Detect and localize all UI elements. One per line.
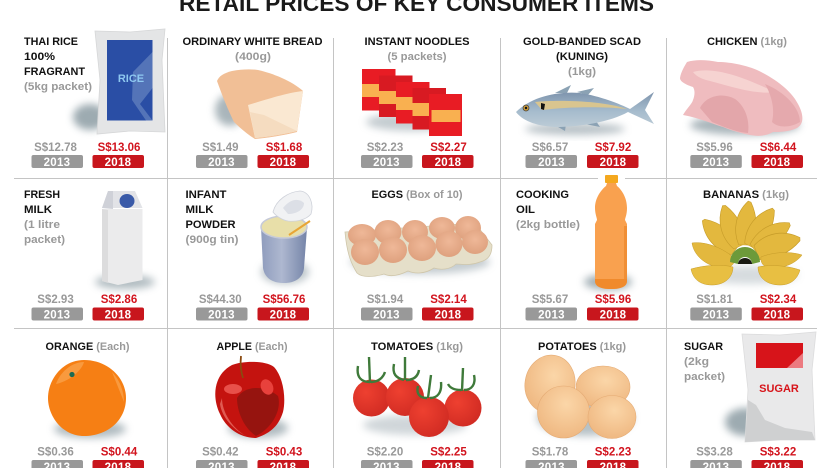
- label: chicken: CHICKEN (1kg): [707, 36, 787, 48]
- panel: infant milk powder: [186, 189, 312, 322]
- year badge 2018: [587, 308, 638, 322]
- price 2013: S$1.78: [532, 446, 569, 458]
- label: infant milk powder: INFANT: [186, 189, 227, 201]
- year badge 2013: [196, 155, 248, 169]
- year badge 2018: [752, 460, 803, 468]
- panel: thai rice: 100%: [24, 51, 55, 63]
- label: orange: ORANGE (Each): [46, 341, 130, 353]
- label: apple: APPLE (Each): [216, 341, 288, 353]
- year badge 2013: 2013: [44, 157, 70, 169]
- year badge 2013: [690, 460, 742, 468]
- year badge 2018: 2018: [270, 310, 297, 322]
- price 2013: S$3.28: [696, 446, 733, 458]
- year badge 2013: 2013: [538, 157, 565, 169]
- panel: fresh milk: MILK: [24, 204, 52, 216]
- icon: potatoes: [520, 351, 636, 438]
- icon: oil bottle: [584, 175, 632, 290]
- label: bananas: BANANAS (1kg): [703, 189, 789, 201]
- icon: banana bunch: [691, 201, 803, 285]
- icon: tomatoes: [353, 357, 482, 437]
- panel: eggs: [345, 189, 492, 322]
- price 2018: S$6.44: [760, 142, 797, 154]
- price 2018: S$2.34: [760, 294, 797, 306]
- price 2018: S$3.22: [760, 446, 796, 458]
- year badge 2018: 2018: [270, 157, 297, 169]
- panel: sugar: packet): [684, 371, 725, 383]
- price 2018: S$0.43: [266, 446, 302, 458]
- label: white bread: ORDINARY WHITE BREAD: [182, 36, 323, 48]
- price 2013: S$2.93: [37, 294, 74, 306]
- icon: rice bag: [73, 29, 165, 134]
- panel: fresh milk: packet): [24, 234, 65, 246]
- year badge 2018: [258, 155, 309, 169]
- panel: white bread: [182, 36, 323, 169]
- year badge 2013: 2013: [208, 157, 235, 169]
- label: cooking oil: COOKING: [516, 189, 569, 201]
- year badge 2013: 2013: [703, 310, 729, 322]
- panel: sugar: [684, 332, 816, 468]
- price 2013: S$5.67: [532, 294, 568, 306]
- panel: orange: [32, 341, 144, 468]
- icon: milk powder tin: [261, 191, 312, 284]
- label: eggs: EGGS (Box of 10): [372, 189, 463, 201]
- year badge 2013: 2013: [373, 157, 400, 169]
- label: gold-banded scad: GOLD-BANDED SCAD: [523, 36, 641, 48]
- year badge 2018: [92, 155, 144, 169]
- panel: instant noodles: [361, 36, 474, 169]
- year badge 2013: [361, 308, 412, 322]
- price 2013: S$44.30: [199, 294, 242, 306]
- price 2013: S$1.49: [202, 142, 239, 154]
- panel: chicken: [680, 36, 803, 169]
- price 2018: S$13.06: [98, 142, 140, 154]
- price 2018: S$56.76: [263, 294, 305, 306]
- icon: rice bag: RICE: [118, 73, 144, 85]
- year badge 2013: 2013: [538, 310, 565, 322]
- price 2013: S$5.96: [696, 142, 733, 154]
- label: thai rice: THAI RICE: [24, 36, 78, 48]
- year badge 2018: 2018: [764, 157, 791, 169]
- panel: fresh milk: (1 litre: [24, 219, 60, 231]
- year badge 2018: 2018: [600, 310, 627, 322]
- year badge 2013: [32, 155, 83, 169]
- panel: thai rice: FRAGRANT: [24, 66, 85, 78]
- year badge 2018: 2018: [105, 157, 132, 169]
- icon: noodle packets: [362, 69, 462, 136]
- price 2018: S$2.23: [595, 446, 631, 458]
- year badge 2018: 2018: [764, 310, 791, 322]
- icon: fish: [516, 85, 654, 135]
- label: potatoes: POTATOES (1kg): [538, 341, 626, 353]
- panel: cooking oil: OIL: [516, 204, 535, 216]
- panel: infant milk powder: POWDER: [186, 219, 236, 231]
- panel: infant milk powder: (900g tin): [186, 234, 239, 246]
- panel: potatoes: [520, 341, 638, 468]
- label: tomatoes: TOMATOES (1kg): [371, 341, 463, 353]
- panel: instant noodles: (5 packets): [388, 51, 447, 63]
- price 2018: S$2.14: [430, 294, 467, 306]
- price 2013: S$6.57: [532, 142, 568, 154]
- year badge 2018: 2018: [105, 310, 132, 322]
- icon: sugar bag: [725, 332, 816, 442]
- price 2013: S$1.81: [696, 294, 733, 306]
- panel: tomatoes: [353, 341, 482, 468]
- icon: chicken: [680, 60, 802, 136]
- price 2018: S$2.86: [101, 294, 137, 306]
- year badge 2018: 2018: [435, 310, 462, 322]
- label: sugar: SUGAR: [684, 341, 723, 353]
- price 2018: S$1.68: [266, 142, 303, 154]
- year badge 2018: 2018: [600, 157, 627, 169]
- panel: thai rice: [24, 29, 165, 169]
- year badge 2018: [422, 308, 474, 322]
- icon: apple: [215, 356, 288, 438]
- year badge 2013: 2013: [44, 310, 70, 322]
- price 2013: S$2.20: [367, 446, 403, 458]
- panel: gold-banded scad: [516, 36, 654, 169]
- panel: gold-banded scad: (1kg): [568, 66, 596, 78]
- icon: milk carton: [95, 191, 155, 289]
- label: instant noodles: INSTANT NOODLES: [364, 36, 470, 48]
- panel: white bread: (400g): [235, 51, 271, 63]
- label: fresh milk: FRESH: [24, 189, 60, 201]
- year badge 2013: 2013: [703, 157, 729, 169]
- year badge 2013: 2013: [373, 310, 400, 322]
- price 2013: S$0.42: [202, 446, 239, 458]
- panel: fresh milk: [24, 189, 155, 322]
- icon: bread loaf: [215, 69, 303, 139]
- price 2013: S$2.23: [367, 142, 403, 154]
- icon: sugar bag: SUGAR: [759, 383, 799, 395]
- price 2013: S$0.36: [37, 446, 74, 458]
- price 2018: S$5.96: [595, 294, 631, 306]
- year badge 2013: 2013: [208, 310, 235, 322]
- price 2013: S$12.78: [34, 142, 78, 154]
- panel: cooking oil: [516, 175, 638, 322]
- price 2018: S$2.27: [430, 142, 467, 154]
- panel: thai rice: (5kg packet): [24, 81, 92, 93]
- panel: infant milk powder: MILK: [186, 204, 214, 216]
- icon: egg carton: [345, 216, 492, 276]
- panel: sugar: (2kg: [684, 356, 709, 368]
- panel: bananas: [690, 189, 803, 322]
- price 2013: S$1.94: [367, 294, 404, 306]
- price 2018: S$7.92: [595, 142, 631, 154]
- panel: apple: [196, 341, 309, 468]
- price 2018: S$0.44: [101, 446, 138, 458]
- year badge 2013: [526, 308, 577, 322]
- year badge 2018: 2018: [435, 157, 462, 169]
- price 2018: S$2.25: [430, 446, 467, 458]
- panel: gold-banded scad: (KUNING): [556, 51, 608, 63]
- panel: cooking oil: (2kg bottle): [516, 219, 580, 231]
- icon: orange: [48, 360, 126, 438]
